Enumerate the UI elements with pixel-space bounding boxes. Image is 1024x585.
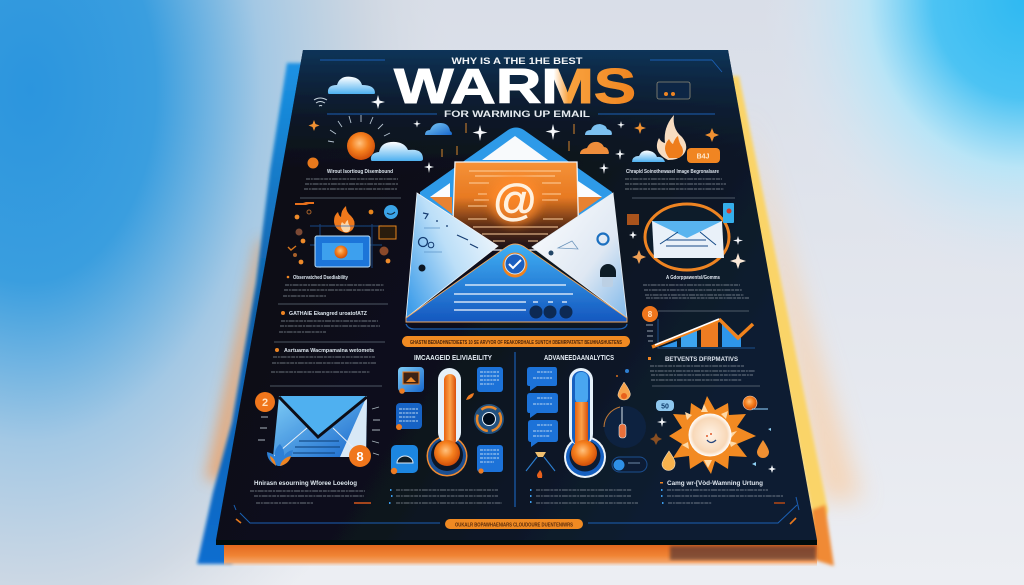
envelope: side pockets [430,181,602,214]
text block: top right [625,169,735,198]
footer frame lines [234,497,799,523]
icon: tripod burner [526,452,555,478]
icon tile: monitor [398,367,424,394]
text block: bottom left [250,480,371,503]
icon: at sign: @ [493,176,537,225]
envelope: left flap [406,193,498,318]
icon: badge fifty: 50 [661,404,669,410]
text block: mid right [643,275,749,298]
banner: orange strip [402,336,630,347]
thermometer: orange [426,368,474,476]
banner: orange strip: GHASTM BEDIADHNETDIEETS 10 SE ARVYOR OF REAKORDHALE SUNTCH DBEMRPATATET BEUHNASHUETENS [410,340,622,346]
poster side shadows [197,63,862,566]
text block: bottom right [660,480,785,503]
envelope: inner flap [482,136,548,160]
text block: left column item 3: Asrtuama Wacmpamaina wetomets [284,348,374,354]
envelope: front flap [406,244,627,329]
icon: gauge dial [604,406,646,448]
icon: badge fifty [656,400,674,411]
poster panel [216,50,817,545]
banner: footer pill: OUKALR BOPAWHAENIARS CLOUDOURE DUENTENIWRS [455,522,573,528]
heading: advanced analytics: ADVANEEDAANALYTICS [544,353,614,362]
text block: bottom right: Camg wr-[Vòd-Wamning Urtung [667,480,763,487]
icon: small white sparkles [371,95,625,174]
icon: flame drop centre right [616,369,630,400]
text block: top left [300,169,401,198]
text block: top right: Chrapld Soinothewasel Image Begronalsare [626,169,719,175]
illustration: smiling sun [669,396,756,474]
bar chart [642,306,755,348]
envelope: back flap [420,128,612,215]
icon: orange accents [308,120,719,142]
heading: mid right list: BETVENTS DFRPMATIVS [665,357,738,363]
text block: beneath chart [650,366,760,386]
text block: left column item 1 [278,275,388,304]
icon: top right message panel [657,82,690,99]
icon: drops and sparkles around sun [650,396,776,473]
icon: flame over card [310,206,382,268]
heading: subtitle: FOR WARMING UP EMAIL [444,109,590,120]
footer accent marks [236,518,796,524]
envelope: right flap [532,193,627,318]
icon: orange note left [308,158,318,168]
text block: bullets centre right [530,490,638,503]
thermometer: blue [564,368,606,478]
text block: top left: Wirout Isortioug Disembound [327,169,393,175]
speech bubbles [527,367,558,447]
illustration: envelope with badges: 2 [262,397,268,409]
icon: ring dial [474,404,504,434]
header frame lines [320,60,722,114]
text block: left column item 2: GATHAIE Ekangred uroatofATZ [289,311,368,317]
speech tile: bottom [477,445,503,474]
icon: slider pill [612,457,647,472]
text block: left column item 1: Observatched Dsediability [293,275,349,281]
bar chart: 8 [648,310,653,319]
icon: wifi [314,98,327,106]
illustration: envelope with badges [255,392,380,467]
icon: vertical dashes [442,123,574,157]
illustration: circled envelope [627,203,746,270]
illustration: envelope with badges: 8 [356,449,364,464]
text block: left column item 2 [274,311,385,342]
text block: bullets centre left [389,490,502,503]
envelope: letter [452,162,579,250]
icon: flame and badge: B4J [697,154,710,160]
heading: WARMS: WARMS [394,60,636,114]
icon: scattered mini icons [288,202,398,264]
icon: flame and badge [632,115,720,163]
text block: bottom left: Hnirasn esourning Wforee Loeolog [254,480,357,487]
speech tile: top [477,367,503,392]
heading: increased deliverability: IMCAAGEID ELIVIAEILITY [414,353,492,362]
heading: top line: WHY IS A THE 1HE BEST [452,56,583,67]
icon tile: note [396,403,422,430]
banner: footer pill [445,519,583,529]
text block: mid right: A Gdorppawentsl/Gomms [666,275,720,281]
icon: small clouds centre [425,123,612,154]
text block: left column item 3 [270,348,382,386]
divider: column rule [514,352,516,507]
icon: top left cloud [328,77,375,94]
icon tile: gauge [391,445,418,474]
icon: sun and cloud [328,115,423,161]
